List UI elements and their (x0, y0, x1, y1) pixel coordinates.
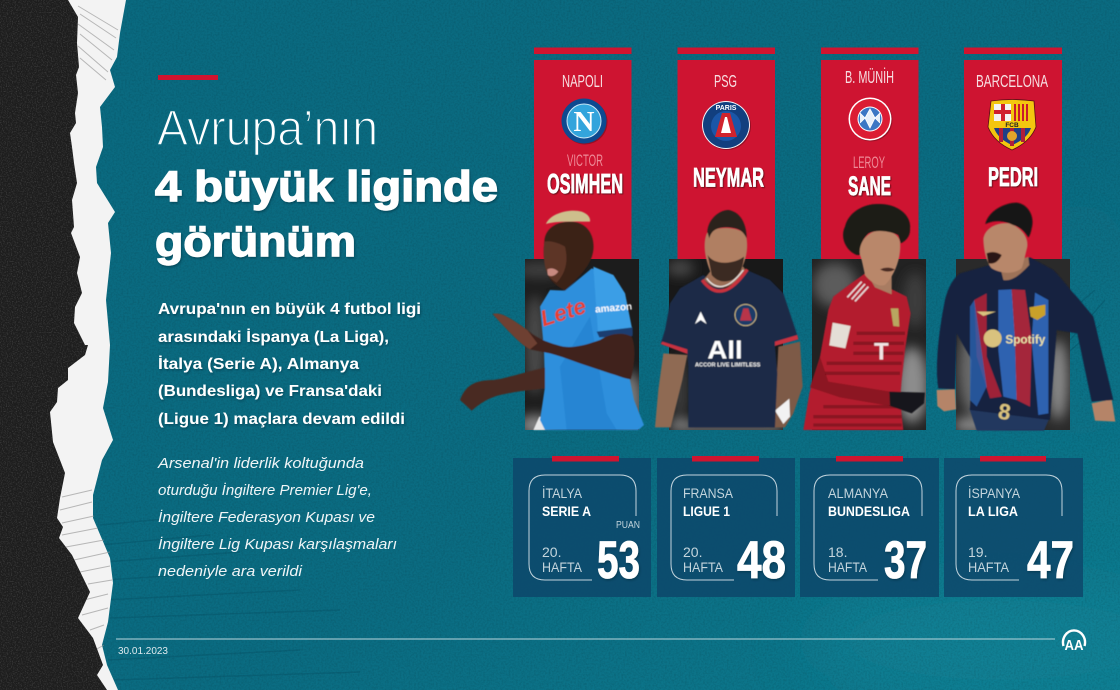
stats panel: Ligue 1: FRANSA (683, 485, 734, 501)
title: 4 büyük liginde (155, 163, 498, 211)
stats panel: La Liga: HAFTA (968, 559, 1010, 575)
italic note text block: Arsenal'in liderlik koltuğunda (157, 455, 364, 472)
stats panel: Serie A: SERIE A (542, 503, 591, 519)
intro text block: İtalya (Serie A), Almanya (158, 355, 359, 373)
player photo: Sane (803, 204, 925, 430)
banner: Barcelona: PEDRI (988, 162, 1038, 192)
player photo: Neymar (655, 210, 803, 427)
player photo: Osimhen: amazon (595, 301, 633, 316)
stats panel: Ligue 1: 48 (737, 531, 786, 590)
stats panel: Bundesliga (800, 456, 939, 597)
stats panel: Serie A (513, 456, 651, 597)
title (155, 100, 498, 266)
stats panel: La Liga: LA LIGA (968, 503, 1018, 519)
banner: Barcelona: BARCELONA (976, 71, 1048, 91)
torn paper shading (60, 6, 118, 650)
stats panel: Serie A: HAFTA (542, 559, 583, 575)
stats panel: Ligue 1: HAFTA (683, 559, 724, 575)
banner: Napoli: NAPOLI (562, 71, 603, 91)
black textured strip (0, 0, 110, 690)
icon: Barcelona crest (988, 100, 1036, 150)
banner: PSG: NEYMAR (693, 162, 764, 192)
player photo: Neymar: All (707, 337, 743, 365)
stats panel: Ligue 1: 20. (683, 544, 702, 560)
icon: Napoli crest: N (574, 106, 595, 138)
banner: Napoli (534, 48, 632, 259)
banner: Napoli: OSIMHEN (547, 168, 623, 199)
italic note text block: oturduğu İngiltere Premier Lig'e, (158, 482, 372, 499)
icon: PSG crest (702, 101, 751, 150)
player photo: Osimhen: Lete (537, 292, 589, 331)
stats panel: Bundesliga: HAFTA (828, 559, 868, 575)
stats panel: La Liga: 47 (1027, 531, 1074, 590)
banner: Bayern Münih: LEROY (853, 153, 885, 172)
title: görünüm (155, 218, 356, 266)
intro text block: (Bundesliga) ve Fransa'daki (158, 383, 382, 400)
icon: PSG crest: PARIS (716, 105, 737, 112)
italic note text block: İngiltere Federasyon Kupası ve (158, 509, 375, 526)
footer rule and date: 30.01.2023 (118, 645, 168, 657)
banner: Bayern Münih: B. MÜNİH (845, 67, 894, 87)
player photo: Neymar: ACCOR LIVE LIMITLESS (695, 362, 761, 368)
title: Avrupa’nın (157, 100, 378, 156)
italic note text block: nedeniyle ara verildi (158, 563, 303, 580)
icon: Barcelona crest: FCB (1005, 122, 1019, 129)
stats panel: La Liga (944, 456, 1083, 597)
intro text block: Avrupa'nın en büyük 4 futbol ligi (158, 301, 421, 318)
icon: Napoli crest (562, 98, 608, 144)
stats panel: La Liga: İSPANYA (968, 484, 1021, 501)
stats panel: Bundesliga: BUNDESLIGA (828, 503, 910, 519)
intro text block: arasındaki İspanya (La Liga), (158, 328, 389, 346)
banner: Bayern Münih (821, 48, 918, 259)
stats panel: Serie A: PUAN (616, 520, 640, 531)
banner: Bayern Münih: SANE (848, 171, 891, 201)
intro text block (158, 301, 421, 428)
stats panel: Ligue 1 (657, 456, 795, 597)
banner: Barcelona (964, 48, 1062, 259)
stats panel: Serie A: 20. (542, 544, 561, 560)
stats panel: La Liga: 19. (968, 544, 987, 560)
player photo: Pedri (937, 203, 1115, 431)
stats panel: Bundesliga: 37 (884, 531, 927, 590)
stats panel: Ligue 1: LIGUE 1 (683, 503, 730, 519)
stats panel: Serie A: İTALYA (542, 484, 583, 501)
banner: Napoli: VICTOR (567, 151, 603, 170)
photo background panels (515, 259, 1070, 435)
player photo: Pedri: Spotify (1005, 333, 1046, 346)
player photo: Osimhen (460, 211, 644, 430)
title accent bar (158, 75, 218, 80)
torn paper edge: white (50, 0, 126, 690)
player photo: Sane: T (874, 338, 889, 365)
italic note text block (157, 455, 397, 580)
italic note text block: İngiltere Lig Kupası karşılaşmaları (158, 536, 397, 553)
banner: PSG (678, 48, 775, 259)
stats panel: Serie A: 53 (597, 531, 640, 590)
stats panel: Bundesliga: 18. (828, 544, 847, 560)
icon: Bayern crest (848, 98, 892, 142)
stats panel: Bundesliga: ALMANYA (828, 485, 889, 501)
intro text block: (Ligue 1) maçlara devam edildi (158, 411, 405, 428)
icon: AA logo (1063, 630, 1085, 654)
banner: PSG: PSG (714, 71, 737, 91)
player photo: Pedri: 8 (997, 399, 1012, 425)
icon: AA logo: AA (1064, 637, 1084, 654)
